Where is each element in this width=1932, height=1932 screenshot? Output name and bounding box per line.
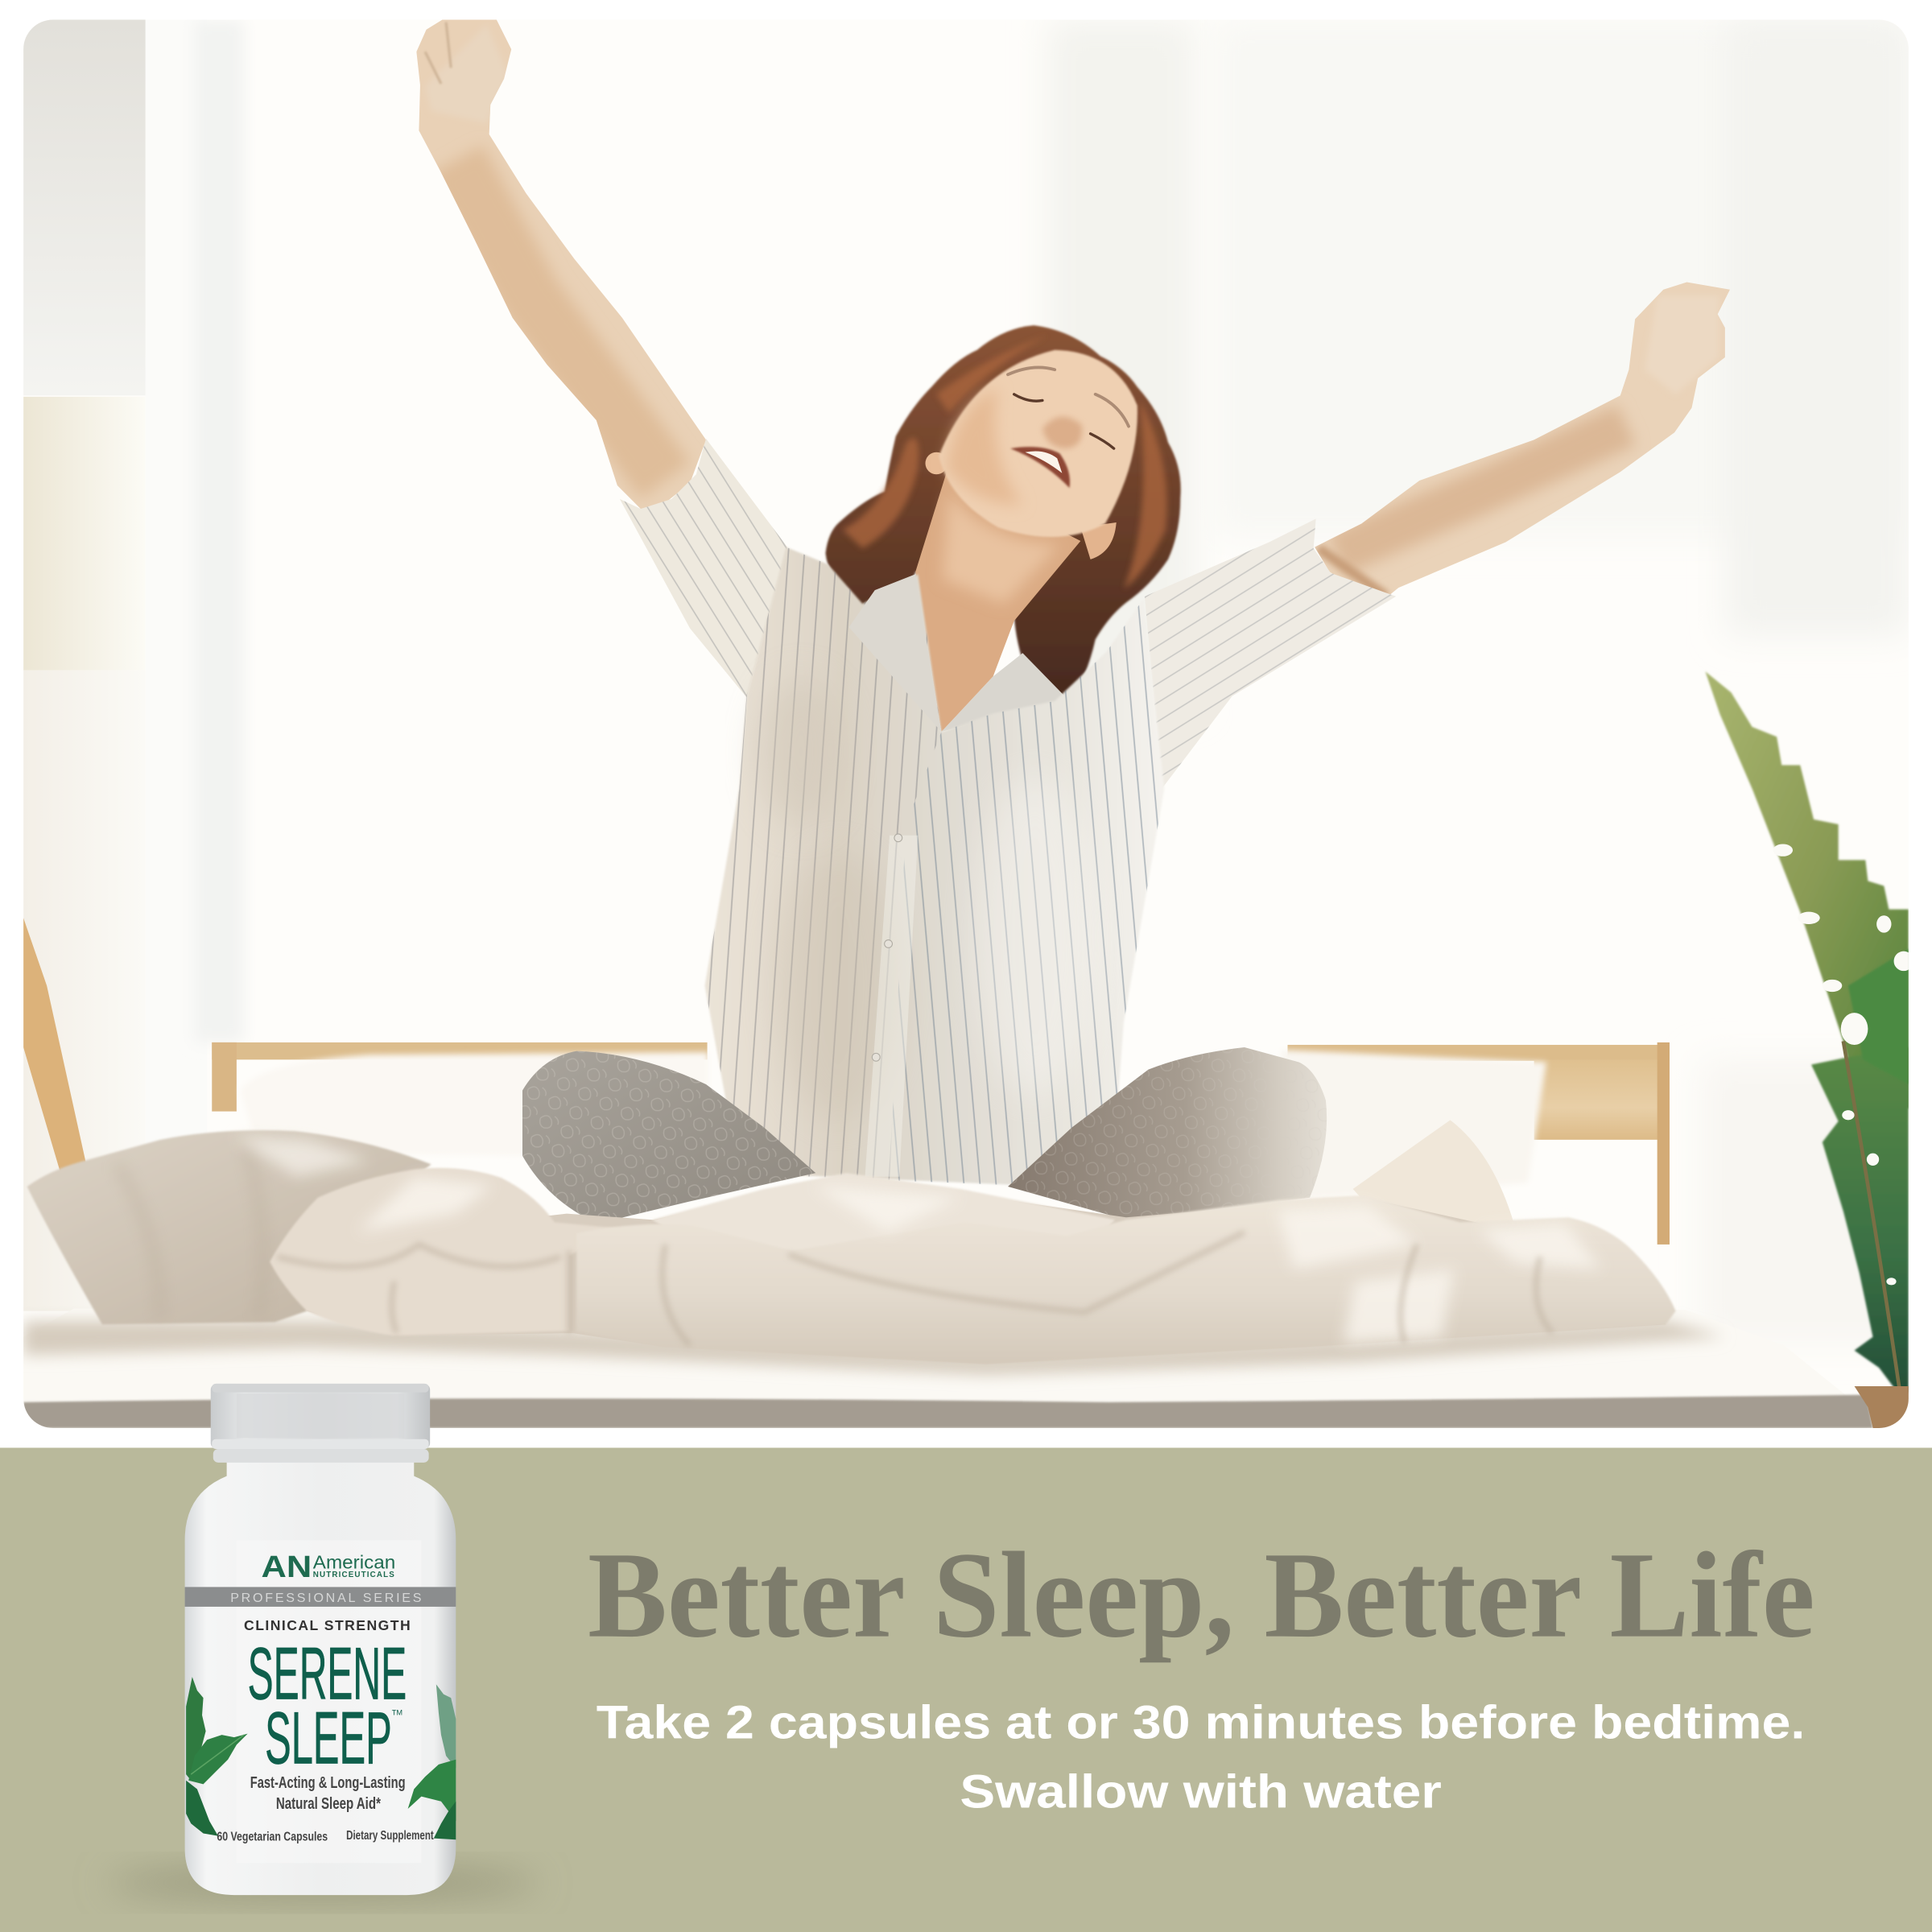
lower frond <box>1811 1047 1909 1393</box>
hair highlights <box>843 335 1167 589</box>
white blossoms <box>1773 844 1913 1285</box>
hair mass <box>826 325 1181 701</box>
dosage instructions: Take 2 capsules at or 30 minutes before bedtime. <box>597 1697 1805 1749</box>
professional series band: PROFESSIONAL SERIES <box>230 1591 421 1605</box>
left crossed leg <box>522 1051 815 1224</box>
bottle cap <box>211 1384 430 1449</box>
duvet center peak <box>652 1173 1115 1269</box>
cheek shading <box>947 388 1022 506</box>
left leaves <box>186 1677 248 1836</box>
bottle ground shadow <box>107 1865 539 1900</box>
capsule count: 60 Vegetarian Capsules <box>217 1831 328 1844</box>
bottle neck ring <box>213 1449 429 1463</box>
panel: olive footer band <box>0 1447 1932 1932</box>
panel: bedroom photo of woman stretching <box>23 12 1913 1433</box>
brand logo: AN <box>261 1550 312 1584</box>
duvet creases <box>277 1232 1553 1345</box>
wooden chair leg at left <box>23 918 86 1177</box>
woman stretching <box>407 12 1737 1224</box>
product bottle: Serene Sleep <box>185 1384 456 1895</box>
inner collar right <box>941 653 1070 732</box>
teeth <box>1025 451 1062 473</box>
shirt light and shade <box>759 678 843 826</box>
nose <box>1042 417 1082 448</box>
product tagline <box>250 1774 406 1813</box>
wicker pot <box>1855 1386 1909 1433</box>
product name: SLEEP <box>265 1697 392 1779</box>
stem <box>1843 1041 1900 1393</box>
shirt buttons <box>872 834 902 1061</box>
label highlight <box>237 1540 421 1863</box>
ear near neck <box>1080 522 1117 559</box>
supplement note: Dietary Supplement <box>346 1829 434 1843</box>
ear near hair <box>926 452 945 475</box>
brand logo <box>261 1550 395 1584</box>
eyes and brows <box>1008 367 1129 448</box>
professional series band <box>185 1587 456 1607</box>
shirt placket <box>865 836 918 1177</box>
dark leaf <box>1848 949 1909 1084</box>
brand logo: American <box>313 1551 395 1572</box>
duvet main body <box>576 1195 1676 1364</box>
beige pillow <box>27 1130 431 1324</box>
right crossed leg <box>1008 1047 1327 1220</box>
dosage instructions <box>597 1697 1805 1818</box>
mouth <box>1010 447 1070 488</box>
plant with green leaves <box>1705 671 1913 1433</box>
raised right arm and fist <box>1315 282 1730 594</box>
right leaves <box>408 1684 456 1839</box>
duvet highlights <box>357 1177 1602 1343</box>
right sleeve <box>1145 518 1396 789</box>
heading: Better Sleep, Better Life <box>588 1528 1815 1664</box>
bottle body <box>185 1461 456 1895</box>
duvet left lump <box>270 1168 620 1335</box>
product name: TM <box>392 1709 402 1717</box>
product tagline: Natural Sleep Aid* <box>276 1795 381 1813</box>
white back pillows <box>240 1050 1546 1232</box>
room backdrop with curtains <box>23 19 1909 1428</box>
product name: SERENE <box>248 1633 407 1715</box>
mattress <box>23 1309 1873 1428</box>
lit throat <box>943 493 1059 604</box>
duvet base shadow <box>295 1177 1666 1364</box>
product name <box>248 1633 407 1779</box>
upper frond <box>1705 671 1909 1109</box>
face <box>939 350 1137 537</box>
rumpled duvet <box>270 1168 1676 1364</box>
shirt collar left <box>849 574 941 732</box>
wooden bed headboard <box>212 1042 1670 1245</box>
raised left arm and fist <box>407 12 715 518</box>
left sleeve <box>620 439 787 697</box>
product tagline: Fast-Acting & Long-Lasting <box>250 1774 406 1792</box>
dosage instructions: Swallow with water <box>960 1765 1442 1818</box>
shirt torso <box>705 547 1164 1189</box>
clinical strength: CLINICAL STRENGTH <box>244 1617 411 1633</box>
neck and chest <box>915 473 1080 732</box>
brand logo: NUTRICEUTICALS <box>313 1571 394 1579</box>
